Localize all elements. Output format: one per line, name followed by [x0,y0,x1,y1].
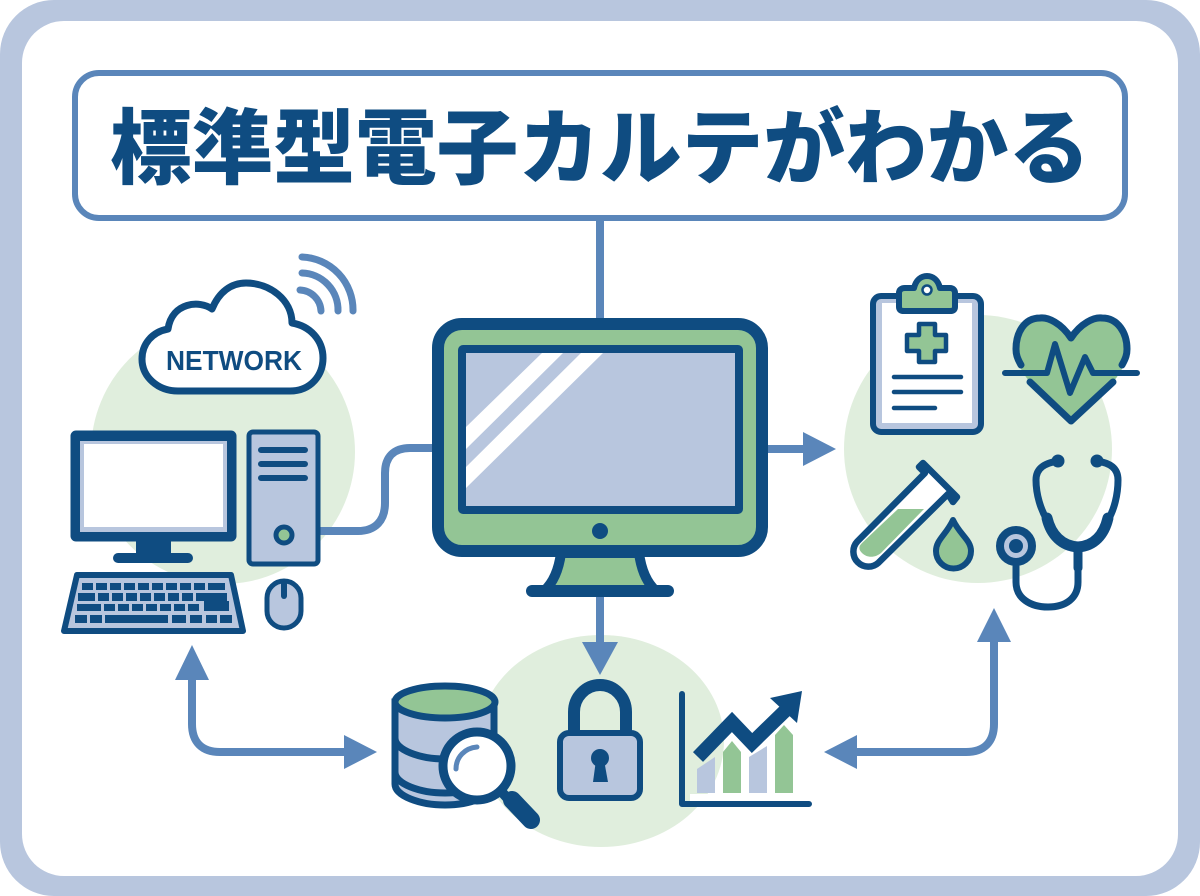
icon: mouse [267,581,301,628]
background circle: left [91,320,355,584]
icon: heart with pulse [1005,318,1137,421]
monitor stand [544,553,656,591]
background circle: bottom [478,635,724,847]
arrow: chart to medical icons [824,608,1011,769]
magnifier [443,732,531,820]
arrow: monitor to security [582,595,618,675]
icon: desktop monitor [73,433,234,563]
background circle: right [844,315,1112,583]
cable: desktop to monitor [318,448,434,531]
icon: test tube [853,463,957,567]
icon: clipboard [873,276,981,432]
camera dot [592,523,608,539]
title box [75,73,1125,218]
icon: stethoscope [1000,454,1118,607]
monitor screen [462,349,739,510]
connector: title to monitor [596,218,604,322]
arrow: keyboard to database [175,645,377,769]
cloud label: NETWORK [166,345,302,376]
icon: keyboard [64,575,243,631]
icon: padlock [560,685,640,798]
screen highlights [466,353,603,488]
icon: main monitor [438,324,762,597]
icon: network cloud [142,283,323,391]
icon: desktop tower [249,432,318,564]
monitor base [526,585,674,597]
title text: 標準型電子カルテがわかる [110,104,1090,195]
icon: database with magnifier [395,686,531,820]
icon: blood drop [936,520,971,568]
icon: wifi signal [300,257,353,311]
monitor body [438,324,762,551]
arrow: monitor to medical icons [766,432,836,466]
icon: growth chart [682,691,810,804]
